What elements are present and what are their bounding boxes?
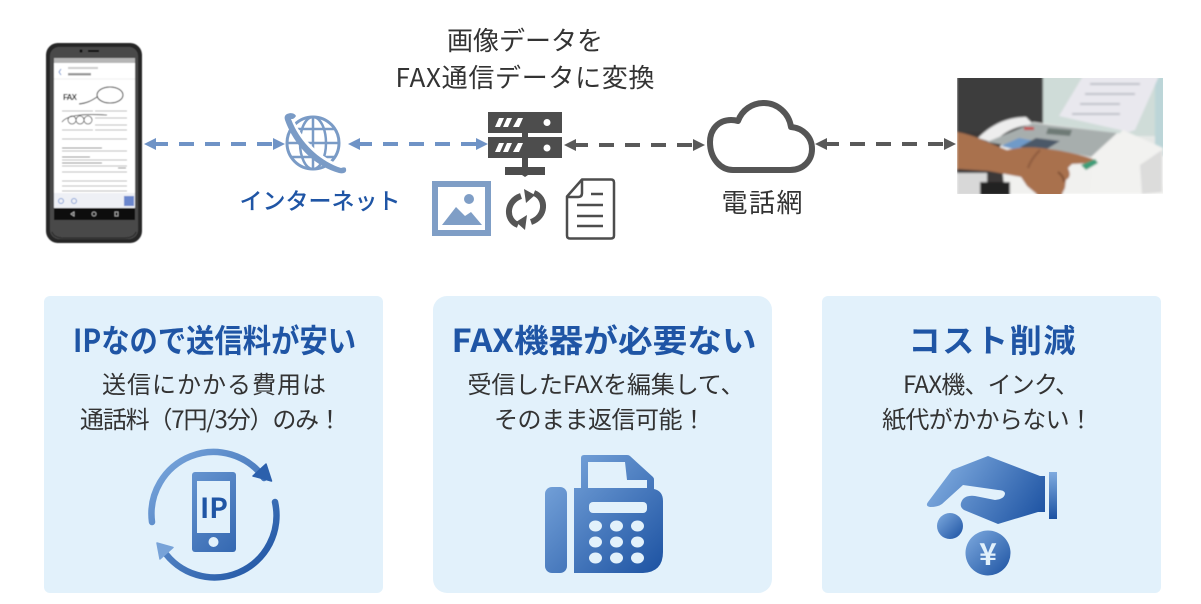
- arrow: phone to internet: [144, 138, 285, 150]
- body text: cost: [80, 365, 342, 435]
- icon: IP phone with cycle arrows: [151, 452, 276, 577]
- body text: no consumables: 紙代がかからない！: [882, 400, 1093, 435]
- body text: edit and reply: 受信したFAXを編集して、: [468, 365, 744, 400]
- icon: image file: [432, 181, 491, 236]
- icon: conversion arrows: [509, 189, 543, 230]
- heading: cost reduction: コスト削減: [908, 316, 1076, 362]
- icon: hand dropping yen coins: [927, 456, 1057, 576]
- body text: cost: 送信にかかる費用は: [102, 365, 326, 400]
- icon: document: [567, 180, 614, 238]
- body text: edit and reply: [468, 365, 744, 435]
- icon: cloud: [710, 103, 812, 170]
- body text: no consumables: [882, 365, 1093, 435]
- arrow: server to telephone network: [564, 139, 705, 151]
- panel: cost reduction: [822, 296, 1161, 593]
- panel: IP call savings: [44, 296, 383, 593]
- heading: image data conversion: FAX通信データに変換: [396, 58, 654, 95]
- icon: IP phone with cycle arrows: IP: [200, 487, 228, 527]
- heading: image data conversion: 画像データを: [447, 21, 603, 58]
- label: internet: インターネット: [240, 182, 400, 216]
- icon: server: [488, 112, 562, 177]
- smartphone with received fax on screen: FAX: [63, 93, 78, 102]
- body text: no consumables: FAX機、インク、: [903, 365, 1079, 400]
- photo: hand operating fax machine: [957, 76, 1165, 196]
- arrow: telephone network to fax: [815, 138, 956, 150]
- heading: cheap because IP: IPなので送信料が安い: [73, 316, 356, 362]
- icon: hand dropping yen coins: ¥: [979, 530, 997, 574]
- body text: cost: 通話料（7円/3分）のみ！: [80, 400, 342, 435]
- label: telephone network: 電話網: [722, 183, 802, 220]
- arrow: internet to server: [348, 138, 488, 150]
- icon: internet globe: [285, 113, 346, 173]
- icon: fax machine: [545, 455, 663, 573]
- body text: edit and reply: そのまま返信可能！: [494, 400, 706, 435]
- smartphone with received fax on screen: [46, 43, 142, 243]
- panel: no fax machine needed: [433, 296, 772, 593]
- heading: image data conversion: [396, 21, 654, 95]
- heading: no fax equipment: FAX機器が必要ない: [452, 316, 756, 362]
